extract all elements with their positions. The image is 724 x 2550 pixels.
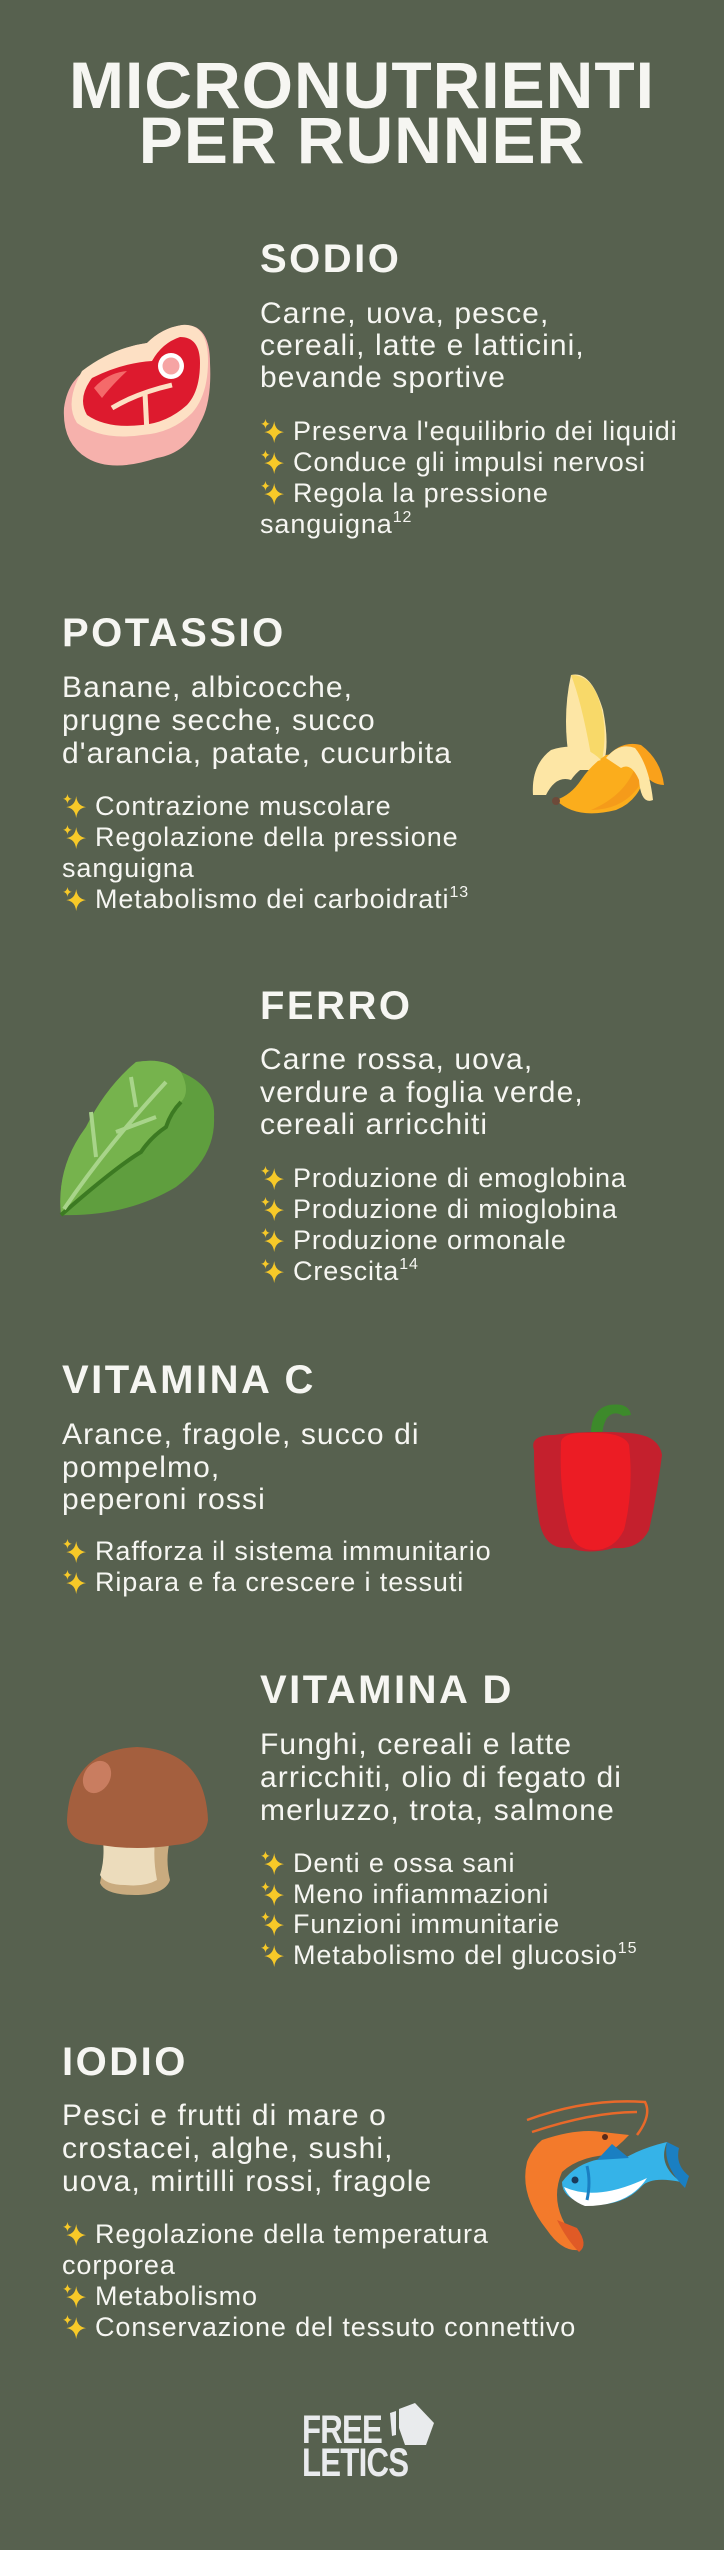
list: vitamina c benefits: Rafforza il sistema immunitario <box>95 1536 492 1566</box>
text: potassio sources: Banane, albicocche, <box>62 671 353 704</box>
list: iodio benefits: Conservazione del tessuto connettivo <box>95 2312 576 2342</box>
list: potassio benefits: Contrazione muscolare <box>95 791 392 821</box>
heading: sodio: SODIO <box>260 237 401 281</box>
text: iodio sources: Pesci e frutti di mare o <box>62 2099 387 2132</box>
list: sodio benefits: Preserva l'equilibrio dei liquidi <box>293 416 678 446</box>
heading: vitamina c: VITAMINA C <box>62 1358 316 1402</box>
list: vitamina d benefits: Meno infiammazioni <box>293 1878 549 1908</box>
icon: banana <box>532 674 664 814</box>
list: vitamina c benefits: Ripara e fa crescere i tessuti <box>95 1567 464 1597</box>
text: iodio sources: crostacei, alghe, sushi, <box>62 2132 394 2165</box>
list: ferro benefits <box>261 1163 627 1286</box>
list: potassio benefits: sanguigna <box>62 853 195 883</box>
text: iodio sources <box>62 2099 432 2198</box>
text: vitamina d sources: merluzzo, trota, salmone <box>260 1794 615 1827</box>
icon: mushroom <box>67 1747 208 1895</box>
list: vitamina d benefits: Metabolismo del glucosio15 <box>293 1940 637 1970</box>
heading: vitamina d: VITAMINA D <box>260 1668 514 1712</box>
heading: iodio: IODIO <box>62 2040 188 2084</box>
section: sodio <box>64 237 678 539</box>
text: ferro sources: Carne rossa, uova, <box>260 1043 533 1076</box>
icon: lettuce <box>60 1060 214 1216</box>
title <box>69 48 655 177</box>
text: vitamina d sources: arricchiti, olio di fegato di <box>260 1761 622 1794</box>
list: iodio benefits: Metabolismo <box>95 2281 258 2311</box>
list: ferro benefits: Produzione di mioglobina <box>293 1194 618 1224</box>
logo text <box>302 2408 408 2485</box>
list: iodio benefits: corporea <box>62 2250 176 2280</box>
list: potassio benefits <box>62 791 469 914</box>
text: vitamina c sources: pompelmo, <box>62 1450 220 1484</box>
text: sodio sources <box>260 297 585 394</box>
text: potassio sources: d'arancia, patate, cucurbita <box>62 737 452 770</box>
list: vitamina d benefits <box>261 1848 637 1970</box>
list: ferro benefits: Crescita14 <box>293 1256 419 1286</box>
section: potassio <box>62 611 664 914</box>
logo text: FREE <box>302 2408 382 2452</box>
text: potassio sources <box>62 671 452 770</box>
list: sodio benefits: Conduce gli impulsi nervosi <box>293 447 646 477</box>
text: ferro sources: verdure a foglia verde, <box>260 1076 584 1108</box>
title: PER RUNNER <box>139 103 585 177</box>
logo: freeletics <box>302 2403 434 2485</box>
section: vitamina d <box>67 1668 637 1970</box>
text: ferro sources <box>260 1043 584 1141</box>
logo mark <box>390 2403 434 2445</box>
list: iodio benefits: Regolazione della temperatura <box>95 2219 489 2249</box>
heading: ferro: FERRO <box>260 984 412 1028</box>
text: iodio sources: uova, mirtilli rossi, fragole <box>62 2165 432 2198</box>
text: vitamina d sources: Funghi, cereali e latte <box>260 1728 572 1761</box>
section: vitamina c <box>62 1358 662 1597</box>
section: ferro <box>60 984 627 1286</box>
list: vitamina d benefits: Funzioni immunitarie <box>293 1909 560 1939</box>
icon: shrimp and fish <box>525 2100 689 2252</box>
list: ferro benefits: Produzione di emoglobina <box>293 1163 627 1193</box>
list: vitamina d benefits: Denti e ossa sani <box>293 1848 515 1878</box>
text: potassio sources: prugne secche, succo <box>62 704 376 737</box>
icon: red pepper <box>533 1404 662 1552</box>
logo text: LETICS <box>302 2441 408 2485</box>
list: ferro benefits: Produzione ormonale <box>293 1225 567 1255</box>
list: sodio benefits: sanguigna12 <box>260 509 412 539</box>
list: sodio benefits <box>260 416 678 539</box>
section: iodio <box>62 2040 689 2342</box>
list: iodio benefits <box>62 2219 576 2342</box>
text: sodio sources: Carne, uova, pesce, <box>260 297 549 330</box>
list: sodio benefits: Regola la pressione <box>293 478 549 508</box>
icon: meat <box>64 324 210 466</box>
text: sodio sources: bevande sportive <box>260 361 506 394</box>
text: vitamina d sources <box>260 1728 622 1827</box>
list: potassio benefits: Regolazione della pressione <box>95 822 459 852</box>
text: vitamina c sources: peperoni rossi <box>62 1483 266 1516</box>
list: potassio benefits: Metabolismo dei carboidrati13 <box>95 884 469 914</box>
text: sodio sources: cereali, latte e latticini, <box>260 329 585 362</box>
text: vitamina c sources: Arance, fragole, succo di <box>62 1418 420 1451</box>
text: ferro sources: cereali arricchiti <box>260 1108 488 1141</box>
text: vitamina c sources <box>62 1418 420 1516</box>
list: vitamina c benefits <box>63 1536 492 1597</box>
title: MICRONUTRIENTI <box>69 48 655 122</box>
heading: potassio: POTASSIO <box>62 611 286 655</box>
